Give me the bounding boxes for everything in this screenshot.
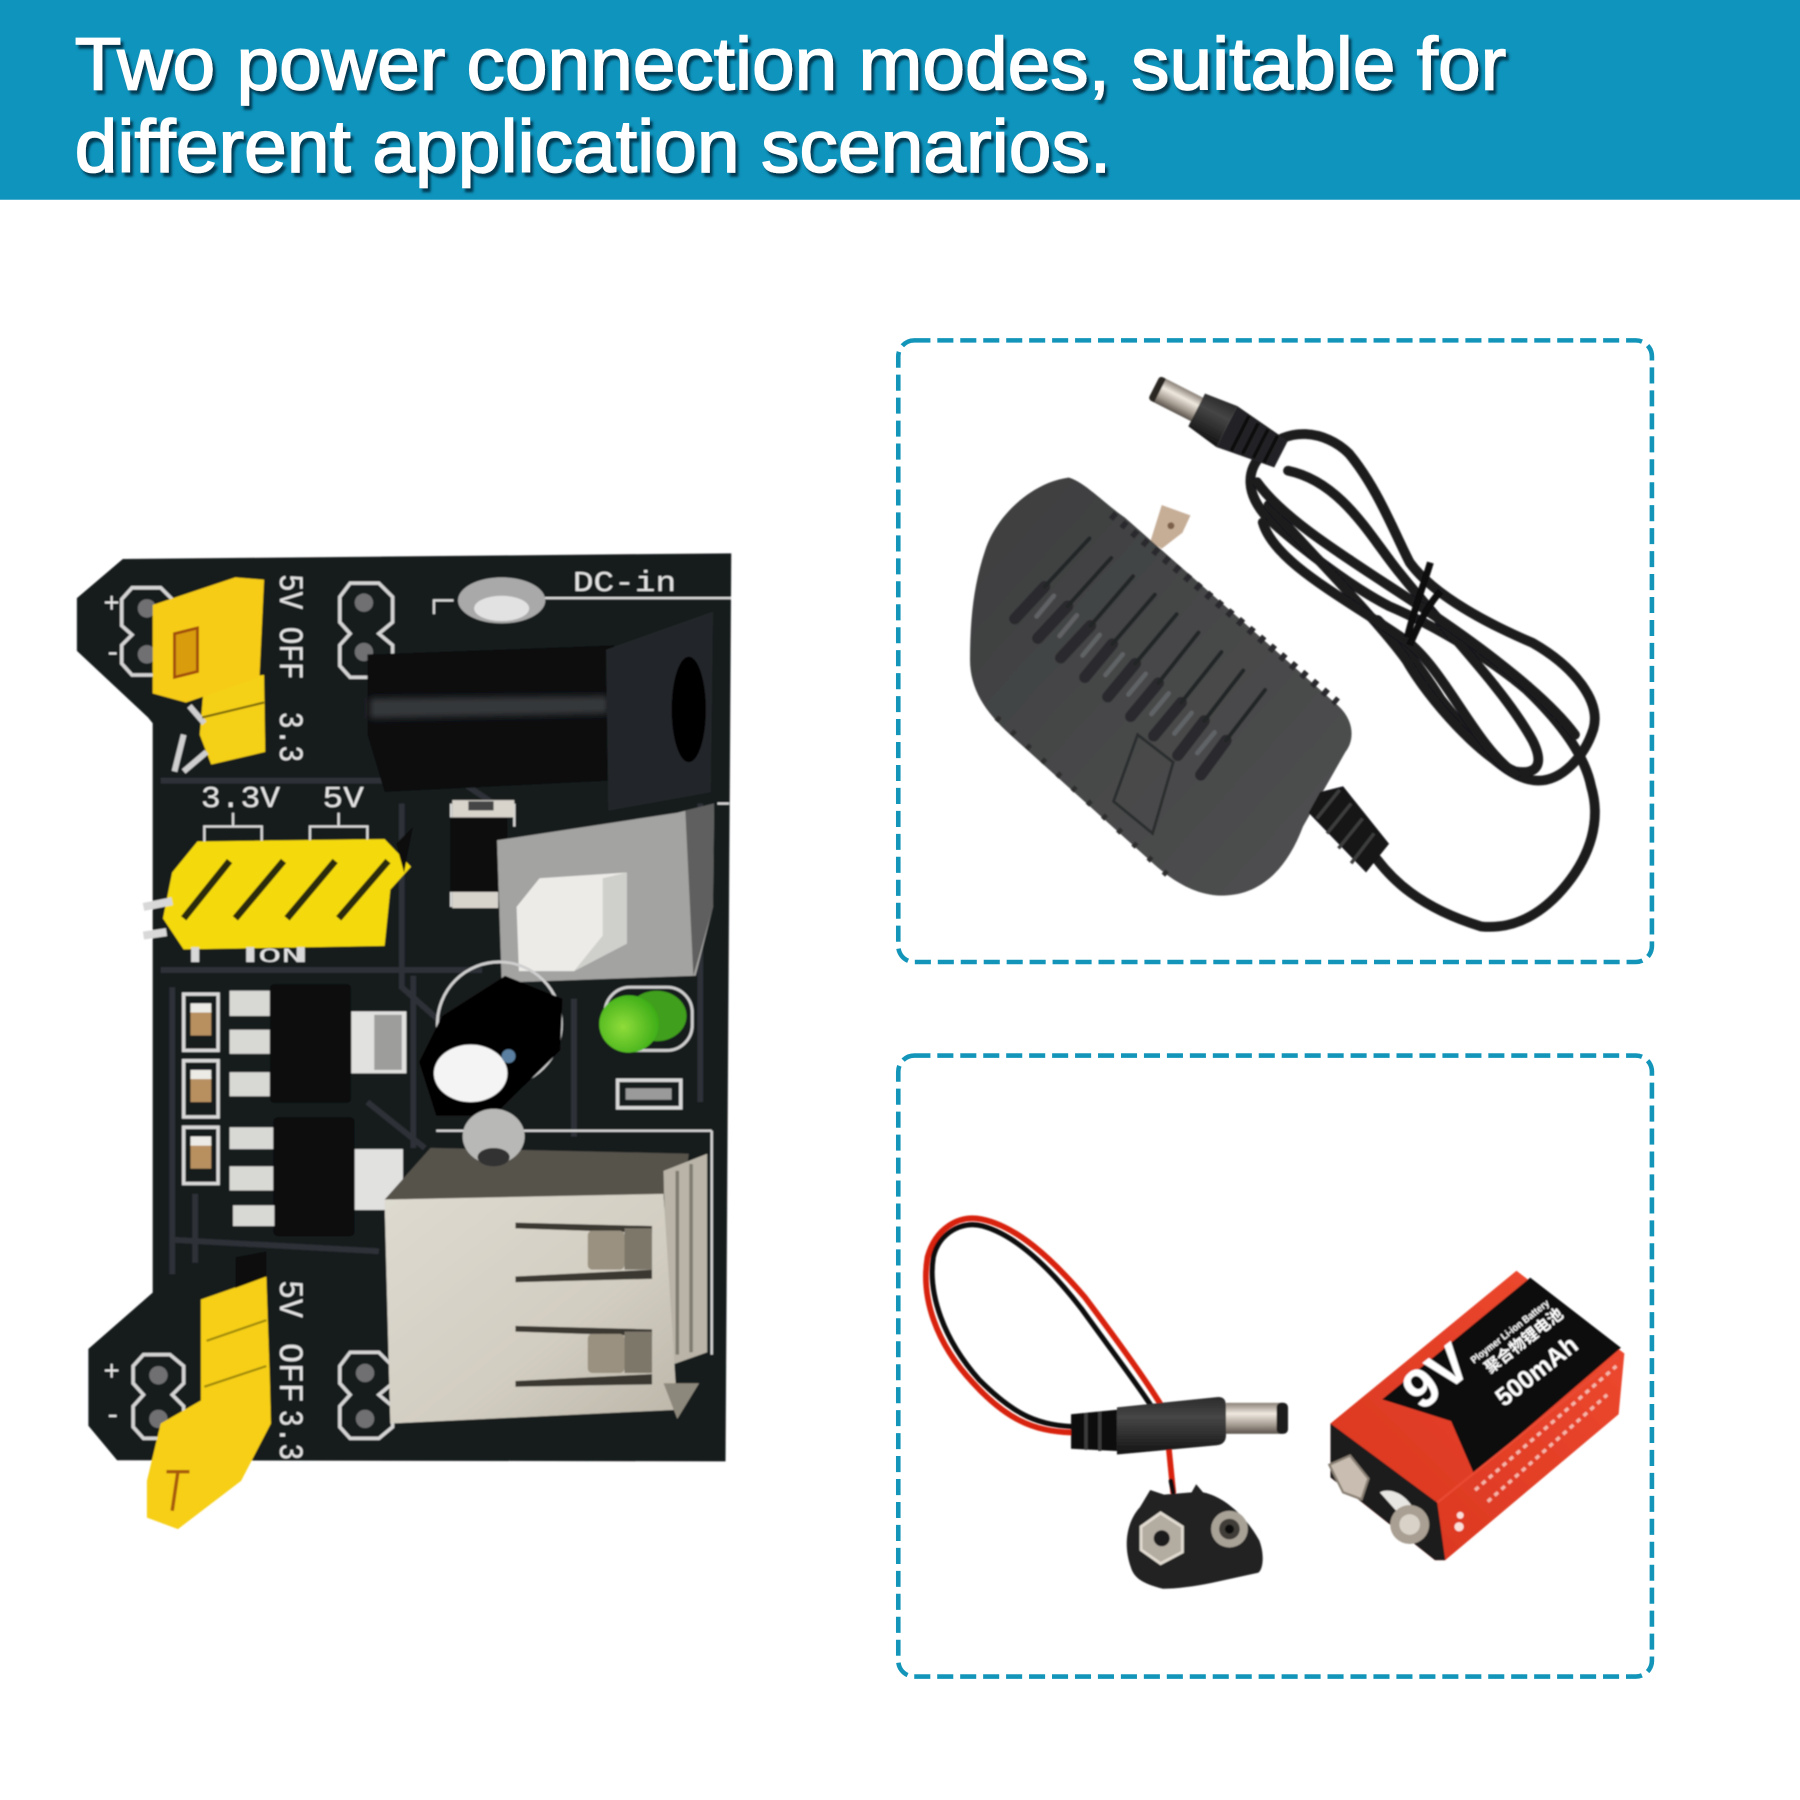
battery terminals bbox=[1329, 1456, 1429, 1544]
title: different application scenarios. bbox=[75, 104, 1111, 188]
battery snap clip bbox=[1127, 1484, 1263, 1589]
circuit board bbox=[77, 553, 731, 1461]
board labels: 5V OFF bbox=[269, 574, 308, 680]
board labels: - bbox=[104, 1401, 121, 1432]
label recess bbox=[1114, 735, 1173, 833]
board labels: DC-in bbox=[573, 567, 676, 600]
board labels: + bbox=[103, 590, 120, 621]
strain relief bbox=[1309, 786, 1389, 872]
barrel connector bbox=[1071, 1397, 1288, 1454]
board labels bbox=[103, 567, 676, 1460]
board labels: + bbox=[103, 1358, 120, 1389]
battery side dots bbox=[1454, 1512, 1464, 1531]
green LED bbox=[599, 987, 692, 1108]
adapter top ridge teeth bbox=[1111, 514, 1337, 703]
title bbox=[75, 22, 1506, 188]
silkscreen outlines bbox=[204, 598, 731, 1355]
adapter lower ridge teeth bbox=[996, 717, 1171, 878]
title: Two power connection modes, suitable for bbox=[75, 22, 1506, 106]
red and black wires bbox=[926, 1218, 1173, 1492]
DC jack bbox=[367, 577, 713, 810]
battery side print bbox=[1475, 1366, 1616, 1502]
9V battery bbox=[1329, 1271, 1624, 1560]
adapter cable bbox=[1250, 434, 1595, 927]
top power jumper bbox=[153, 577, 265, 771]
board labels: 3.3 bbox=[269, 1410, 308, 1460]
panel: battery option bbox=[898, 1056, 1652, 1677]
board labels: ON bbox=[258, 946, 304, 969]
battery label text: 9V bbox=[1390, 1331, 1482, 1421]
battery label text: 500mAh bbox=[1490, 1331, 1584, 1412]
board labels: 3.3V bbox=[201, 782, 281, 817]
board labels: OFF bbox=[269, 1343, 308, 1403]
board labels: - bbox=[104, 639, 121, 670]
header pads bbox=[122, 583, 393, 1438]
board labels: 5V bbox=[269, 1280, 308, 1318]
board labels: 5V bbox=[323, 782, 364, 817]
battery label text bbox=[1390, 1298, 1584, 1421]
board labels: 3.3 bbox=[269, 712, 308, 762]
cable tie bbox=[1407, 562, 1441, 645]
electrolytic capacitor bbox=[419, 962, 562, 1116]
barrel plug bbox=[1143, 369, 1291, 475]
battery label text: 聚合物锂电池 bbox=[1481, 1304, 1567, 1377]
panel: breadboard power module bbox=[77, 553, 731, 1529]
slide switch bbox=[497, 804, 714, 983]
board traces bbox=[161, 781, 700, 1274]
SMD capacitors bbox=[184, 994, 218, 1184]
bottom power jumper bbox=[147, 1251, 271, 1529]
solder joints bbox=[138, 593, 374, 1428]
wall adapter photo bbox=[970, 369, 1595, 927]
SMD diode bbox=[450, 800, 514, 908]
battery cable photo bbox=[926, 1218, 1624, 1589]
header banner bbox=[0, 0, 1800, 200]
rail pin header bbox=[143, 827, 413, 962]
battery label text: Ploymer Li-ion Battery bbox=[1469, 1298, 1552, 1366]
adapter body bbox=[970, 478, 1352, 896]
vent ribs bbox=[1015, 538, 1265, 775]
panel: wall adapter bbox=[898, 340, 1652, 962]
adapter prong bbox=[1150, 505, 1190, 549]
USB socket bbox=[385, 1109, 707, 1423]
voltage regulators bbox=[230, 984, 406, 1236]
